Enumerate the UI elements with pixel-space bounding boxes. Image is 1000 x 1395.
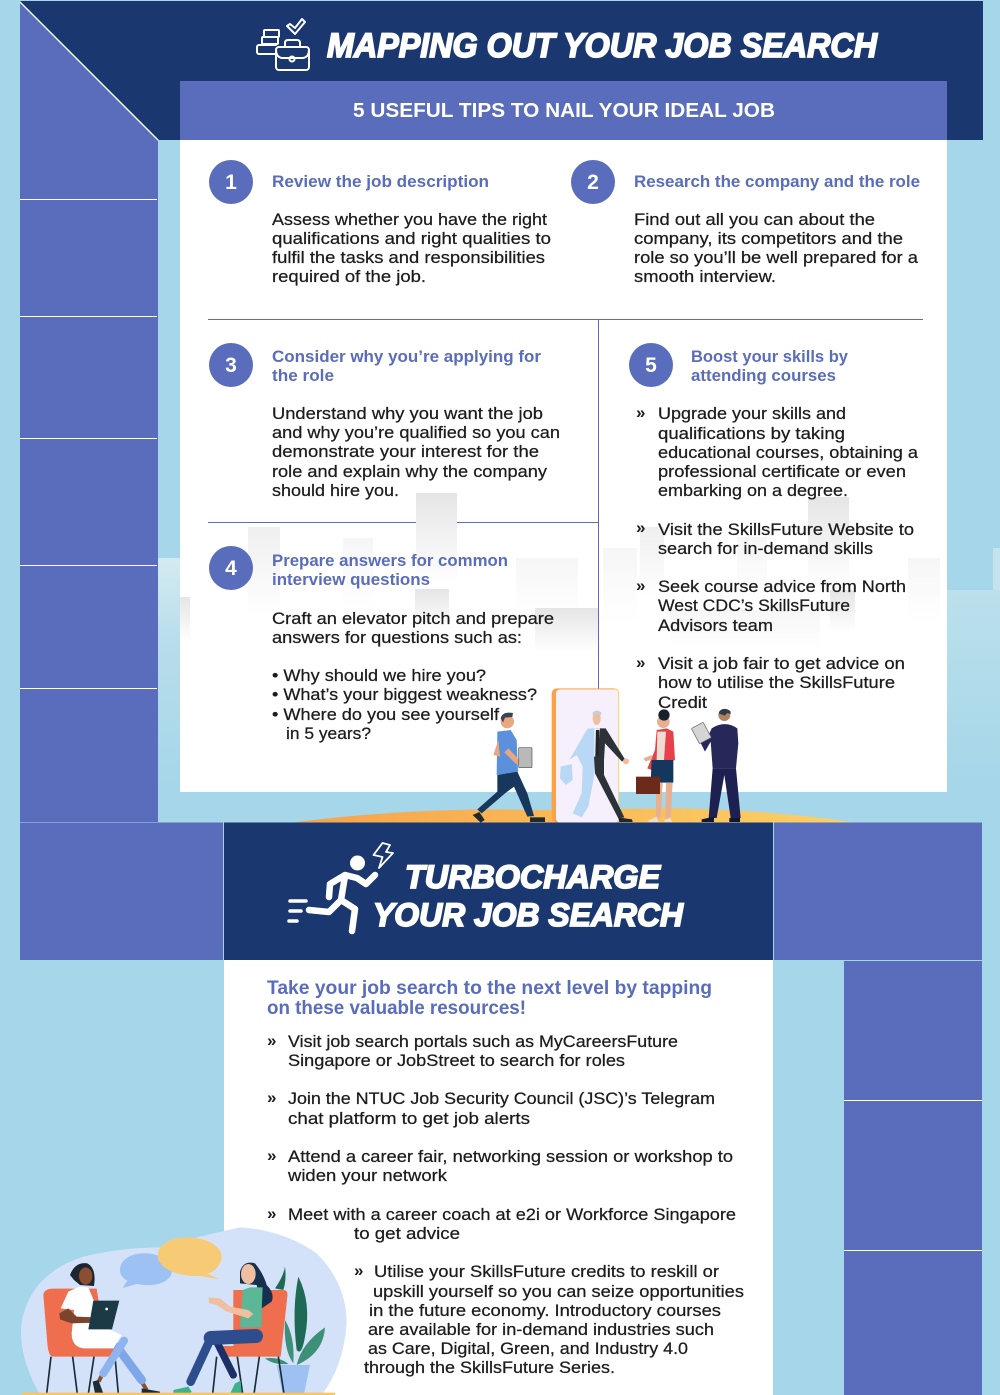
resource: career fair: Attend a career fair, networking session or workshop to <box>288 1147 733 1166</box>
panel: tips <box>180 81 947 792</box>
dark title block <box>224 822 773 960</box>
floor bar <box>22 1393 335 1395</box>
right blue panel <box>774 822 982 960</box>
tip 5: educational courses, obtaining a <box>658 443 919 462</box>
tip 3: demonstrate your interest for the <box>272 442 539 461</box>
tip 5: » <box>636 576 645 595</box>
man in suit <box>691 709 741 822</box>
left chair <box>43 1289 118 1394</box>
businessman <box>593 711 633 822</box>
resource: career fair <box>267 1146 733 1185</box>
tip 1: required of the job. <box>272 267 426 286</box>
white card <box>180 140 947 792</box>
title: turbocharge your job search <box>373 859 684 933</box>
tip 1 <box>209 160 551 286</box>
right woman <box>173 1263 273 1394</box>
resource: job portals <box>267 1031 678 1070</box>
tip 5: West CDC’s SkillsFuture <box>658 596 850 615</box>
illustration: job seekers and door <box>293 688 853 823</box>
tip 1: Review the job description <box>272 172 489 191</box>
resource: skillsfuture credits: as Care, Digital, Green, and Industry 4.0 <box>368 1339 688 1358</box>
heading: on these valuable resources! <box>267 998 526 1019</box>
tip 5: Upgrade your skills and <box>658 404 846 423</box>
resource: telegram <box>267 1088 715 1128</box>
tip 3: 3 <box>225 354 237 377</box>
tip 5: Visit a job fair to get advice on <box>658 654 905 673</box>
resource: telegram: Join the NTUC Job Security Council (JSC)’s Telegram <box>288 1089 715 1108</box>
tip 3 <box>209 343 560 500</box>
door <box>552 688 619 823</box>
tip 3: role and explain why the company <box>272 462 548 481</box>
tip 4: • Why should we hire you? <box>272 666 486 685</box>
tip 1: fulfil the tasks and responsibilities <box>272 248 545 267</box>
resource: job portals: Visit job search portals such as MyCareersFuture <box>288 1032 678 1051</box>
tip 4: • What’s your biggest weakness? <box>272 685 537 704</box>
tip 2 <box>571 160 920 286</box>
resource: telegram: chat platform to get job alerts <box>288 1109 530 1128</box>
tip 2: 2 <box>587 171 599 194</box>
dividers <box>208 320 923 690</box>
illustration: two women talking <box>21 1227 347 1395</box>
faded skyline <box>180 493 940 653</box>
tip 5: Advisors team <box>658 616 773 635</box>
right blue column <box>844 961 982 1395</box>
tip 4: answers for questions such as: <box>272 628 522 647</box>
tip 1: 1 <box>225 171 237 194</box>
tip 5: attending courses <box>691 366 836 385</box>
tip 2: Research the company and the role <box>634 172 920 191</box>
title: mapping out your job search: MAPPING OUT YOUR JOB SEARCH <box>327 27 878 65</box>
tip 3: Consider why you’re applying for <box>272 347 541 366</box>
sub-header band <box>180 81 947 140</box>
tip 4 <box>209 546 554 743</box>
right chair <box>213 1290 287 1394</box>
tip 4: • Where do you see yourself <box>272 705 499 724</box>
woman in red <box>636 709 675 822</box>
resource: career coach: to get advice <box>354 1224 460 1243</box>
tip 5 <box>629 343 919 712</box>
reflection figure <box>560 728 597 817</box>
tip 5: » <box>636 403 645 422</box>
title: turbocharge your job search: TURBOCHARGE <box>405 859 662 895</box>
resource: skillsfuture credits <box>354 1261 744 1377</box>
resource: career fair: » <box>267 1146 276 1165</box>
tip 5: professional certificate or even <box>658 462 906 481</box>
resource: job portals: Singapore or JobStreet to search for roles <box>288 1051 625 1070</box>
tip 1: qualifications and right qualities to <box>272 229 551 248</box>
header band: turbocharge <box>20 822 982 960</box>
tip 3: should hire you. <box>272 481 399 500</box>
resource: telegram: » <box>267 1088 276 1107</box>
left blue panel <box>20 822 223 960</box>
tip 5: » <box>636 518 645 537</box>
tip 5: qualifications by taking <box>658 424 845 443</box>
tip 5: Boost your skills by <box>691 347 849 366</box>
tip 5: how to utilise the SkillsFuture <box>658 673 895 692</box>
blob <box>21 1227 347 1395</box>
resource: skillsfuture credits: are available for in-demand industries such <box>368 1320 714 1339</box>
header band: mapping out <box>20 1 983 822</box>
icon: books and briefcase <box>257 19 309 70</box>
resource: career coach: Meet with a career coach at e2i or Workforce Singapore <box>288 1205 736 1224</box>
tip 3: the role <box>272 366 334 385</box>
resource: career coach: » <box>267 1204 276 1223</box>
tip 1: Assess whether you have the right <box>272 210 547 229</box>
heading: Take your job search to the next level by tapping <box>267 978 712 999</box>
icon: running figure <box>289 843 393 931</box>
walking man <box>473 713 545 823</box>
tip 2: company, its competitors and the <box>634 229 903 248</box>
resource: skillsfuture credits: » <box>354 1261 363 1280</box>
left woman <box>59 1263 160 1394</box>
resource: skillsfuture credits: through the SkillsFuture Series. <box>364 1358 615 1377</box>
tip 5: Visit the SkillsFuture Website to <box>658 520 914 539</box>
tip 5: search for in-demand skills <box>658 539 873 558</box>
sky skyline strips <box>158 548 1000 793</box>
resource: skillsfuture credits: upskill yourself so you can seize opportunities <box>373 1282 744 1301</box>
tip 5: embarking on a degree. <box>658 481 848 500</box>
resource: career coach <box>267 1204 736 1243</box>
tip 5: Seek course advice from North <box>658 577 906 596</box>
tip 3: and why you’re qualified so you can <box>272 423 560 442</box>
tip 2: smooth interview. <box>634 267 776 286</box>
heading: 5 useful tips: 5 USEFUL TIPS TO NAIL YOUR IDEAL JOB <box>353 100 775 122</box>
resource: skillsfuture credits: Utilise your SkillsFuture credits to reskill or <box>374 1262 719 1281</box>
tip 4: 4 <box>225 557 237 580</box>
heading <box>267 978 712 1019</box>
tip 4: Prepare answers for common <box>272 551 508 570</box>
tip 2: Find out all you can about the <box>634 210 875 229</box>
plant <box>265 1267 325 1394</box>
resource: skillsfuture credits: in the future economy. Introductory courses <box>369 1301 721 1320</box>
speech bubbles <box>120 1237 222 1288</box>
left blue panel with diagonal <box>20 2 158 822</box>
tip 5: 5 <box>645 354 657 377</box>
tip 5: Credit <box>658 693 707 712</box>
tip 2: role so you’ll be well prepared for a <box>634 248 919 267</box>
tip 4: Craft an elevator pitch and prepare <box>272 609 554 628</box>
title: turbocharge your job search: YOUR JOB SEARCH <box>373 897 684 933</box>
resource: job portals: » <box>267 1031 276 1050</box>
panel: resources <box>224 960 773 1395</box>
resource: career fair: widen your network <box>287 1166 448 1185</box>
tip 4: interview questions <box>272 570 430 589</box>
tip 5: » <box>636 653 645 672</box>
tip 3: Understand why you want the job <box>272 404 543 423</box>
tip 4: in 5 years? <box>286 724 371 743</box>
ground <box>293 808 853 822</box>
